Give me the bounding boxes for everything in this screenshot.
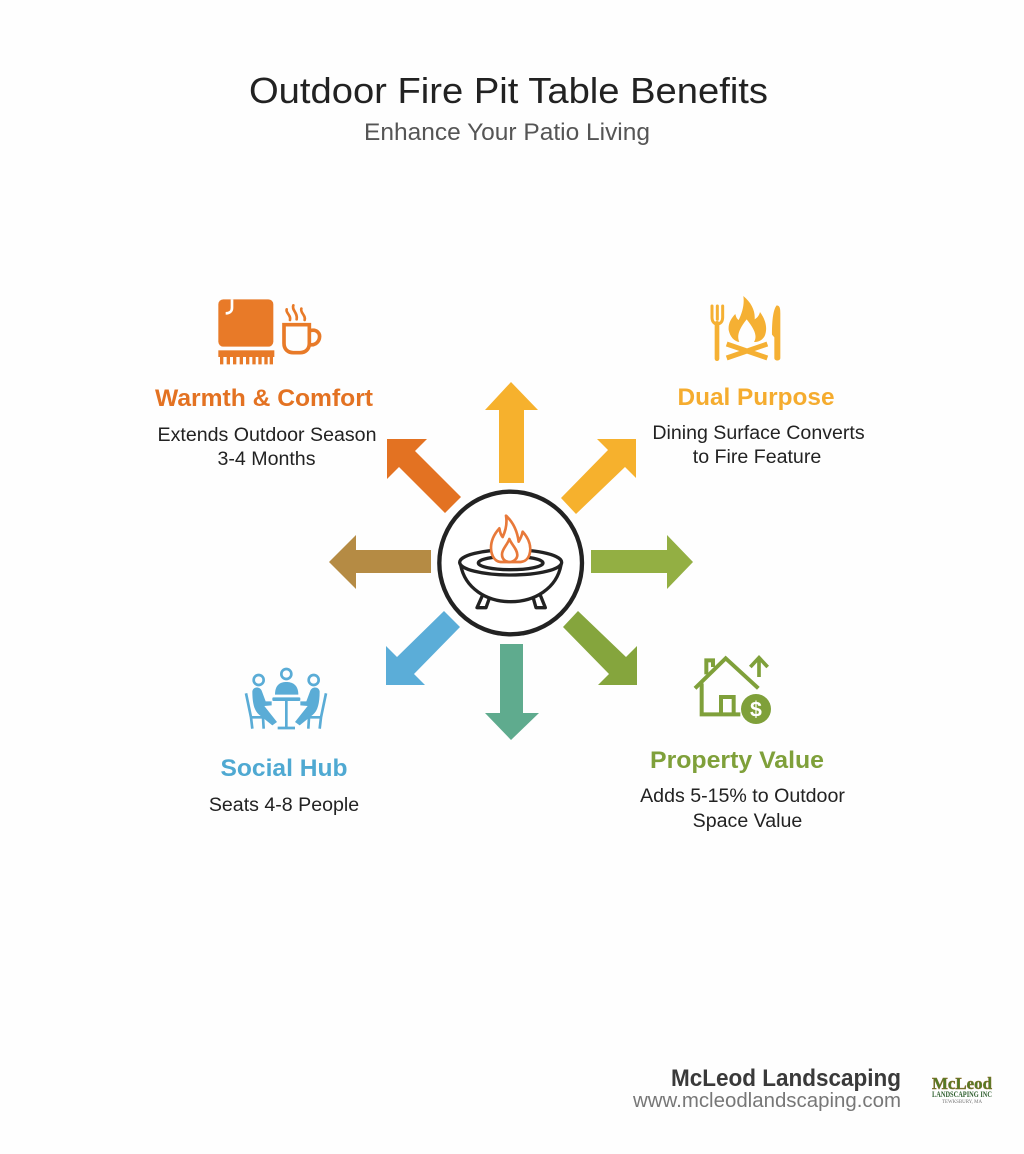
footer brand: McLeod Landscaping	[671, 1065, 901, 1092]
heading: warmth and comfort: Warmth & Comfort	[155, 385, 373, 412]
arrow: down	[485, 644, 539, 740]
bowl	[460, 550, 562, 608]
text: warmth description: 3-4 Months	[217, 448, 316, 470]
icon: house with dollar: $	[750, 698, 762, 722]
footer brand: www.mcleodlandscaping.com	[632, 1090, 901, 1112]
icon: house with dollar	[695, 658, 771, 724]
icon: people at table	[246, 669, 326, 729]
logo: LANDSCAPING INC	[932, 1090, 992, 1099]
subtitle: Enhance Your Patio Living	[364, 119, 650, 146]
center icon: fire pit	[439, 492, 582, 634]
icon: blanket and mug	[218, 299, 320, 364]
text: dual purpose description: Dining Surface Converts	[652, 422, 865, 444]
title: Outdoor Fire Pit Table Benefits	[249, 70, 768, 111]
arrow: right	[591, 535, 693, 589]
text: dual purpose description: to Fire Feature	[693, 446, 821, 468]
arrow: left	[329, 535, 431, 589]
heading: dual purpose: Dual Purpose	[678, 384, 834, 411]
arrow: down-right	[563, 611, 637, 685]
heading: social hub: Social Hub	[220, 755, 348, 782]
footer brand	[632, 1065, 901, 1112]
logo	[932, 1074, 993, 1105]
logo: McLeod	[932, 1074, 993, 1093]
arrow: up-right	[561, 439, 636, 514]
text: warmth description: Extends Outdoor Season	[158, 424, 376, 446]
icon: fork flame knife	[712, 296, 780, 360]
flame	[491, 516, 530, 562]
arrow: up	[485, 382, 538, 483]
logo: TEWKSBURY, MA	[942, 1100, 982, 1105]
heading: property value: Property Value	[650, 747, 824, 774]
text: property value description: Adds 5-15% to Outdoor	[640, 785, 845, 807]
arrow: up-left	[387, 439, 461, 513]
arrow: down-left	[386, 611, 460, 685]
text: property value description: Space Value	[693, 810, 802, 832]
text: social hub description: Seats 4-8 People	[209, 794, 359, 816]
